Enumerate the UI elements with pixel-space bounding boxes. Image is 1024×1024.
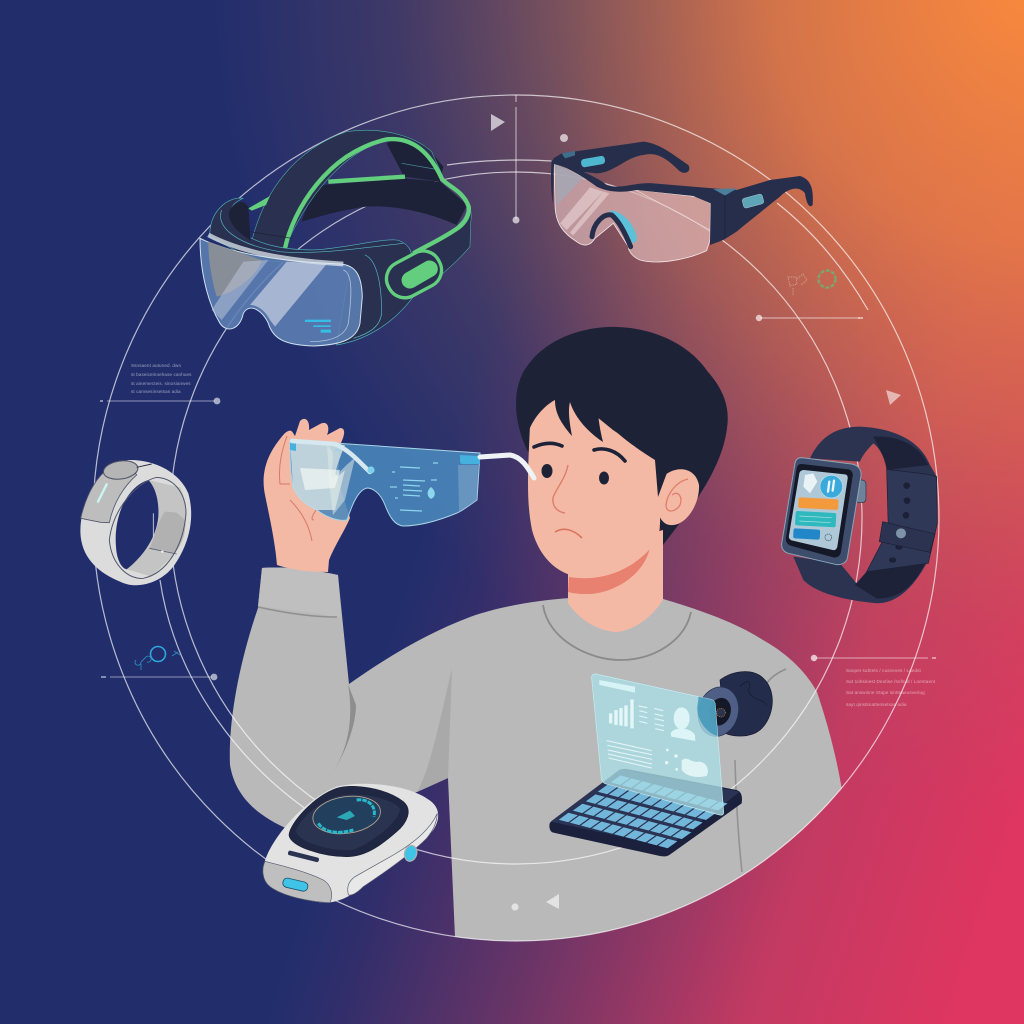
nose: [553, 465, 568, 513]
AR glasses: [551, 142, 813, 262]
mouth: [555, 529, 582, 538]
sweater: [230, 567, 842, 960]
text block right: Sanpet subtets / cusneves / Laedst: [846, 668, 922, 673]
eyebrows: [534, 443, 625, 461]
icon cluster upper right: [788, 270, 836, 296]
text block right: Sat 1ohsinest Deotise /sofsud / Loentaent: [846, 679, 936, 684]
text block right: sayt qinstsnattensetsas adia: [846, 702, 907, 707]
text block left: st camsesinsetsas adia: [131, 389, 181, 394]
hair back: [516, 327, 728, 545]
wearable pendant device: [263, 784, 438, 903]
text block left: st ainemecteis. sinosianwes: [131, 381, 191, 386]
neck: [568, 530, 663, 632]
holographic screen: [592, 674, 724, 815]
keyboard: [549, 769, 742, 856]
icon cluster lower left: [135, 646, 180, 670]
held smart glasses: [290, 439, 534, 526]
camera: [693, 672, 772, 741]
ear: [657, 469, 699, 525]
VR headset: [200, 130, 471, 346]
keyboard with holographic panel: [549, 674, 742, 856]
text block right: [846, 668, 936, 707]
callout line right lower: [811, 655, 936, 661]
lens: [200, 238, 362, 346]
triangle marker right: [886, 390, 901, 405]
text block left: [131, 363, 192, 394]
text block right: Sat answisne Stape sintteaeusveriug: [846, 690, 925, 695]
orbit rings: [93, 95, 939, 941]
hand: [264, 419, 350, 572]
person: [230, 327, 842, 960]
face: [528, 395, 660, 577]
text block left: Ssnsaent autuned. dwn: [131, 363, 181, 368]
strap pod: [380, 245, 448, 304]
callout line left lower: [101, 674, 217, 680]
text block left: st baseiceinoehase canhues: [131, 372, 192, 377]
smart ring: [80, 459, 191, 585]
eyes: [542, 464, 609, 484]
callout line left upper: [100, 398, 220, 404]
callout line upper right: [756, 315, 863, 321]
smart watch: [782, 427, 937, 603]
neck shadow: [568, 547, 650, 594]
bangs: [520, 350, 700, 497]
bottom markers: [511, 894, 559, 911]
vertical annotation with dot: [491, 95, 568, 224]
